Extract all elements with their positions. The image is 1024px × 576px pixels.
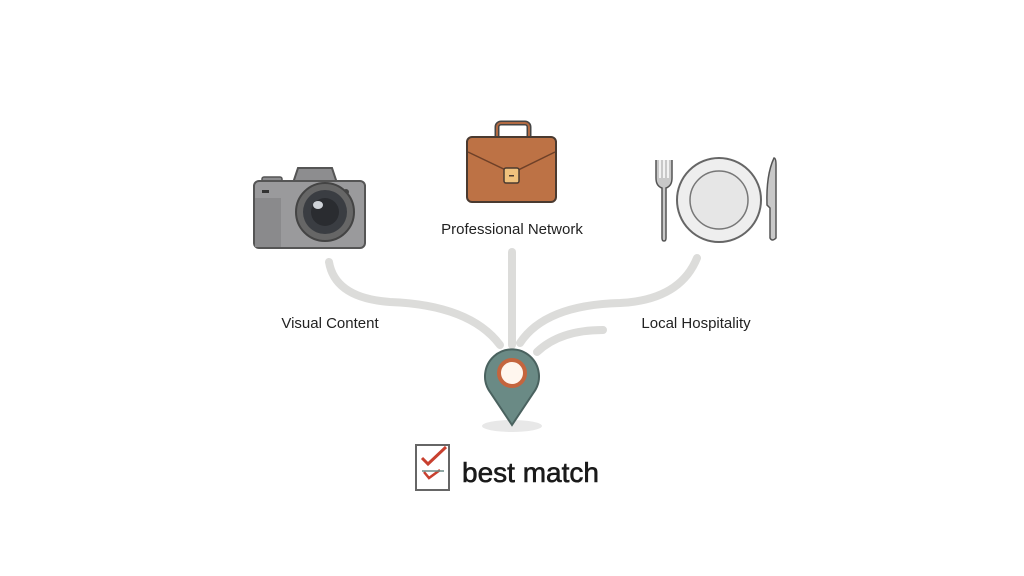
connector lines (329, 252, 697, 352)
icon: camera (254, 168, 365, 248)
icon: briefcase (467, 123, 556, 202)
label: Professional Network: Professional Network (441, 221, 583, 238)
title: best match: best match (462, 457, 599, 488)
icon: location pin (482, 349, 542, 432)
icon: plate and cutlery (656, 158, 776, 242)
icon: checklist (416, 445, 449, 490)
label: Visual Content: Visual Content (281, 315, 379, 332)
label: Local Hospitality: Local Hospitality (641, 315, 751, 332)
